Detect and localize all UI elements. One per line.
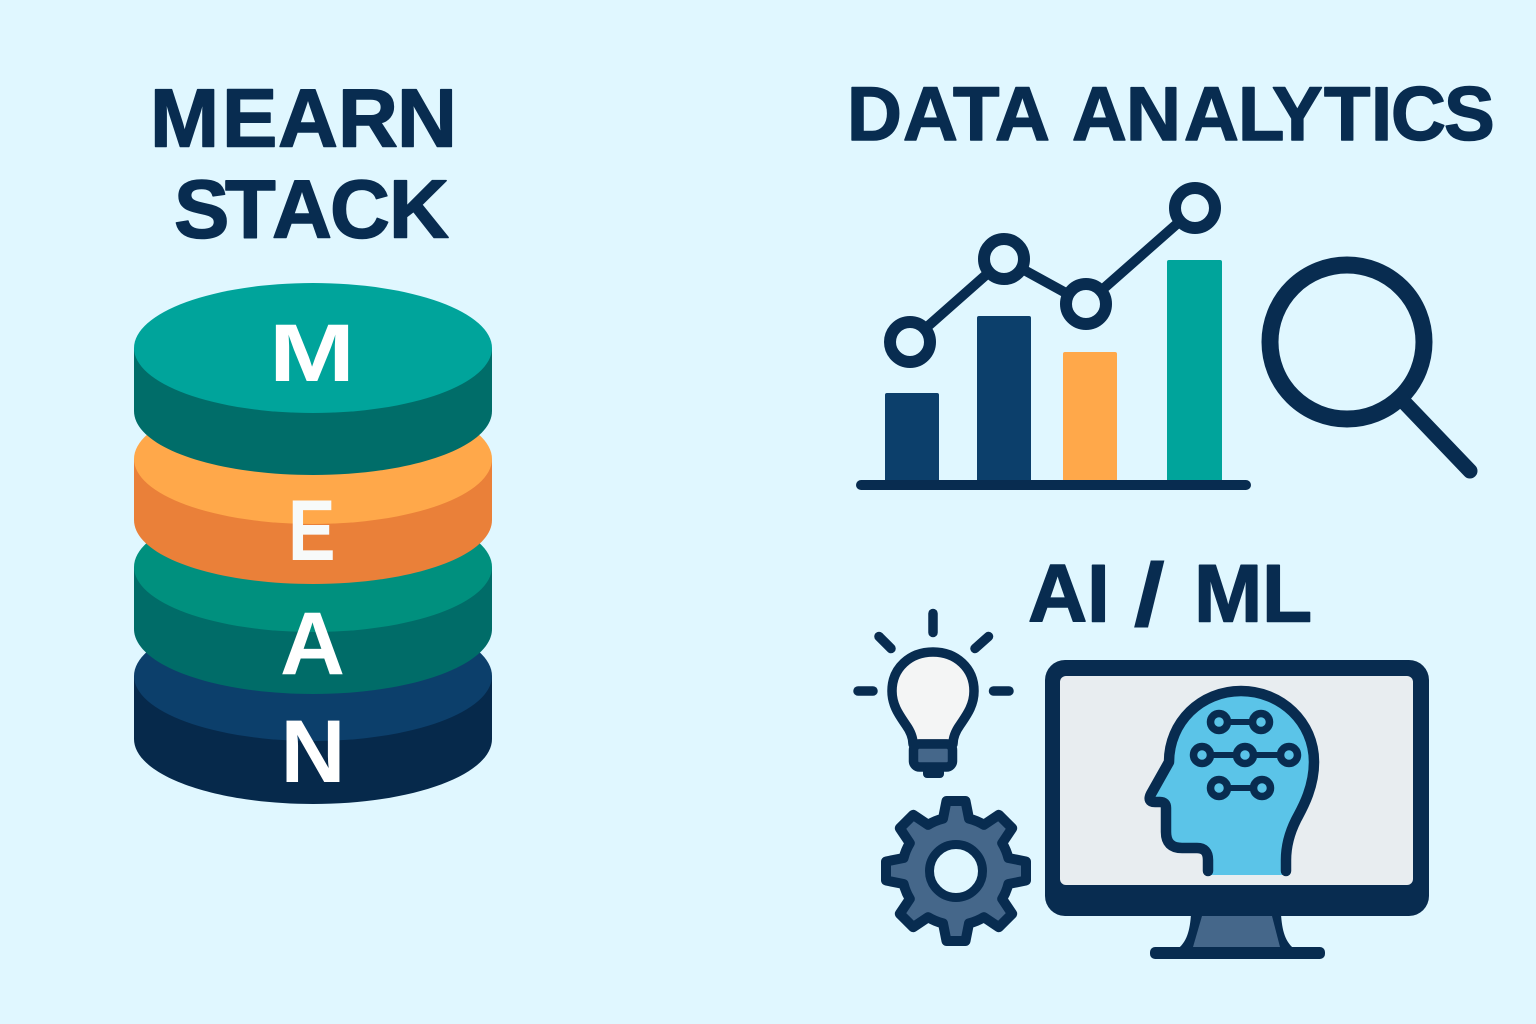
bar 3 xyxy=(1063,352,1117,483)
AI head xyxy=(1150,691,1314,875)
bar 2 xyxy=(977,316,1031,483)
stacked disks: MEAN xyxy=(134,283,492,804)
disk: E xyxy=(134,394,492,584)
circuit nodes xyxy=(1194,714,1298,796)
disk: A xyxy=(134,502,492,694)
trend point markers xyxy=(890,188,1215,362)
icon: magnifying glass xyxy=(1270,265,1470,471)
monitor stand xyxy=(1176,914,1296,950)
heading: AI / ML xyxy=(1028,546,1312,646)
chart baseline xyxy=(861,480,1246,490)
bar 4 xyxy=(1167,260,1222,483)
bar 1 xyxy=(885,393,939,483)
heading: MEARN STACK: MEARN xyxy=(150,72,457,164)
icon: computer monitor xyxy=(1045,660,1429,959)
monitor frame xyxy=(1045,660,1429,916)
bar chart with trend line xyxy=(861,188,1246,485)
disk: N xyxy=(134,611,492,804)
disk: M: M xyxy=(269,308,355,399)
disk: M xyxy=(134,283,492,475)
disk: N: N xyxy=(280,701,346,801)
heading: DATA ANALYTICS: DATA ANALYTICS xyxy=(847,72,1495,157)
heading: AI / ML: ML xyxy=(1194,548,1312,640)
monitor base xyxy=(1150,947,1325,959)
trend line xyxy=(910,208,1195,342)
disk: E: E xyxy=(288,483,336,579)
heading: MEARN STACK xyxy=(150,72,457,256)
monitor screen xyxy=(1060,676,1413,885)
heading: MEARN STACK: STACK xyxy=(174,162,449,256)
heading: AI / ML: / xyxy=(1133,546,1166,646)
heading: AI / ML: AI xyxy=(1028,548,1110,640)
disk: A: A xyxy=(280,593,345,693)
icon: gear xyxy=(886,801,1026,941)
icon: light bulb xyxy=(858,614,1009,778)
